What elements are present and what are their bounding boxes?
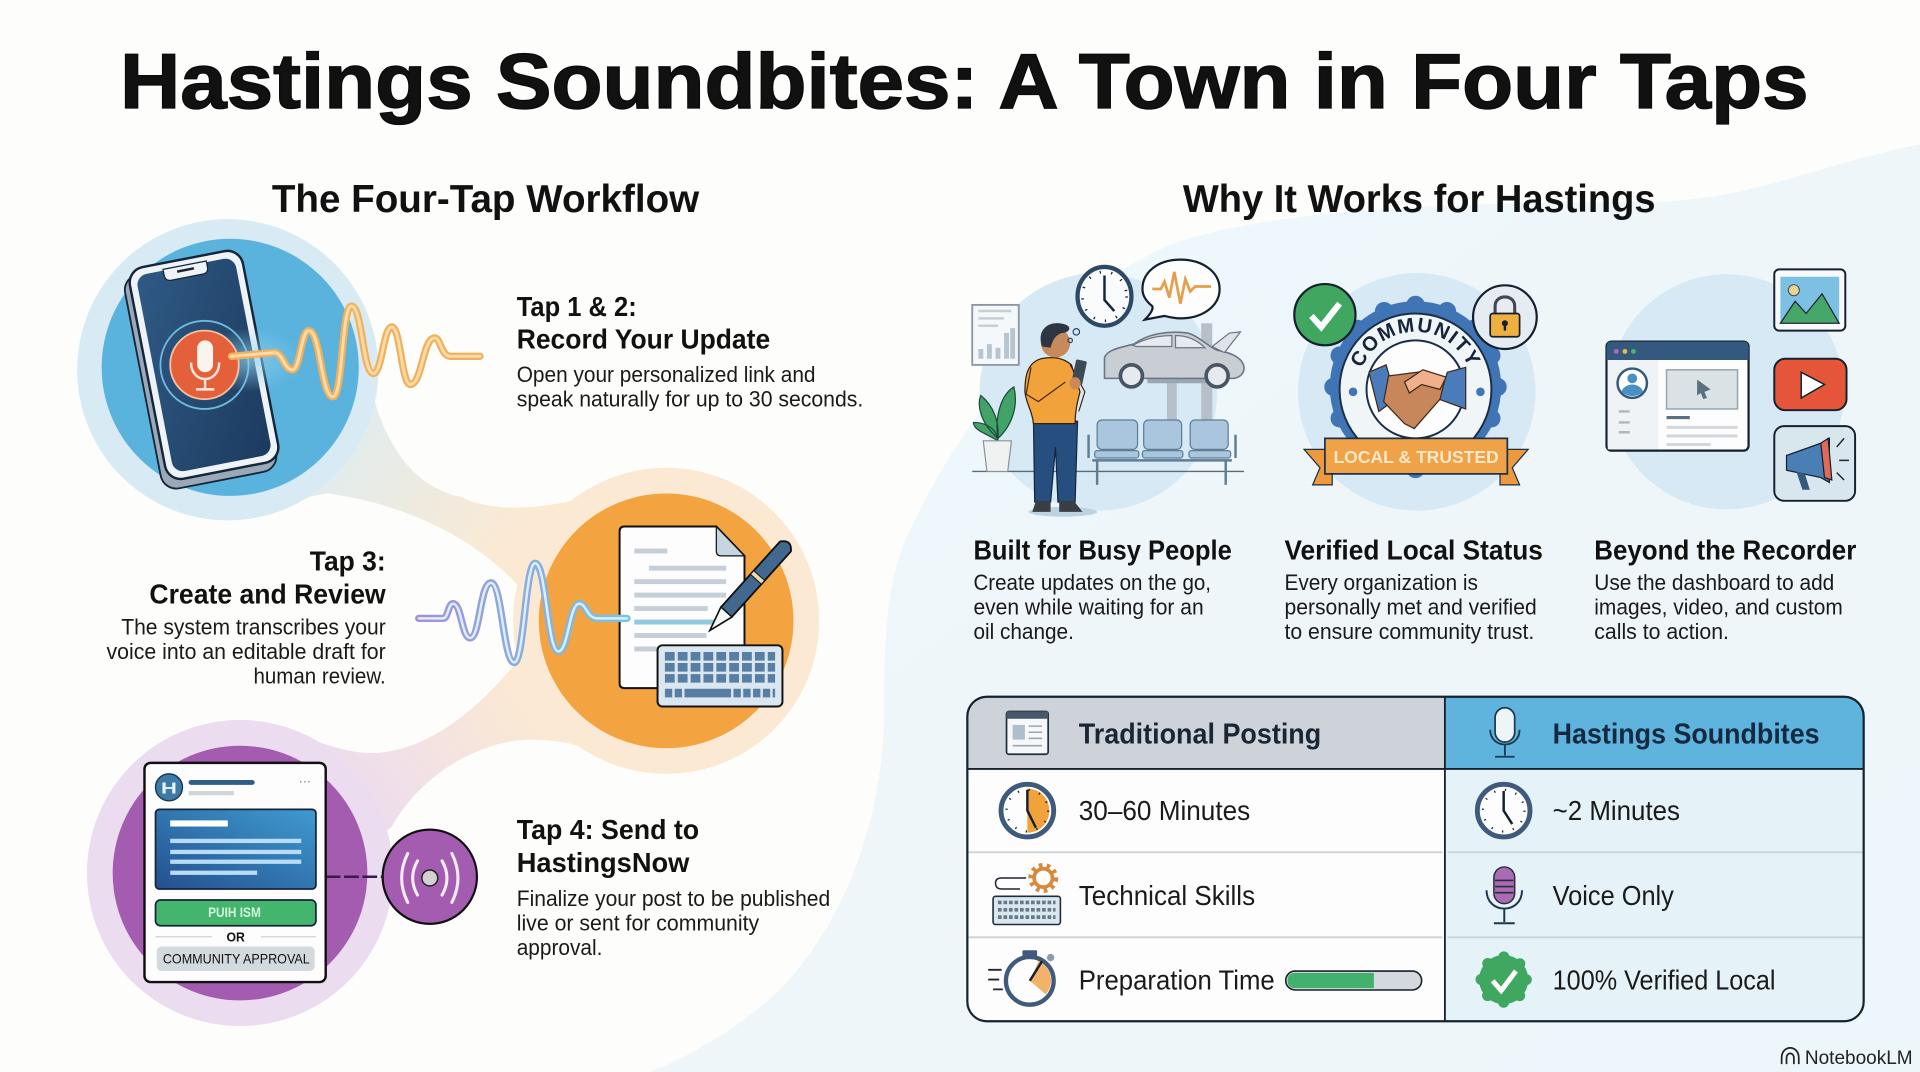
comparison table bbox=[967, 697, 1864, 1021]
step 1: phone illustration bbox=[77, 219, 480, 520]
text block: beyond the recorder: calls to action. bbox=[1594, 619, 1729, 644]
row: verified local bbox=[1480, 956, 1776, 1003]
row: 30-60 minutes: 30–60 Minutes bbox=[1079, 795, 1250, 826]
text block: tap 4: live or sent for community bbox=[517, 911, 759, 936]
post card: PUIH ISM bbox=[208, 905, 261, 920]
mic button bbox=[160, 321, 302, 409]
speech bubble bbox=[1142, 260, 1220, 320]
connector ribbon: orange to purple bbox=[233, 649, 618, 863]
text block: tap 1 and 2: Open your personalized link and bbox=[517, 362, 816, 387]
document bbox=[620, 527, 744, 688]
text block: tap 1 and 2: Tap 1 & 2: bbox=[517, 291, 637, 322]
text block: beyond the recorder: images, video, and custom bbox=[1594, 595, 1843, 620]
illustration: dashboard and media bbox=[1607, 269, 1855, 509]
lift posts bbox=[1167, 323, 1212, 420]
text block: built for busy people: Built for Busy People bbox=[973, 535, 1232, 566]
text block: built for busy people: even while waiting for an bbox=[973, 595, 1204, 620]
row: about 2 minutes bbox=[1477, 784, 1680, 837]
connector ribbon: blue to orange bbox=[251, 355, 624, 612]
text block: beyond the recorder bbox=[1594, 535, 1856, 644]
text block: tap 3: human review. bbox=[253, 663, 386, 688]
text block: verified local status: Every organization is bbox=[1284, 570, 1478, 595]
broadcast icon bbox=[383, 830, 477, 924]
post card: OR bbox=[227, 930, 246, 945]
phone bbox=[121, 248, 283, 491]
scalloped badge bbox=[1324, 296, 1507, 478]
header: hastings soundbites bbox=[1490, 708, 1820, 757]
handshake bbox=[1369, 365, 1466, 429]
text block: tap 3: Create and Review bbox=[149, 579, 386, 610]
blue purple sound wave bbox=[419, 563, 627, 662]
car bbox=[1104, 332, 1244, 387]
floor line bbox=[972, 470, 1244, 472]
header: traditional posting: Traditional Posting bbox=[1079, 718, 1321, 750]
text block: tap 1 and 2 bbox=[517, 291, 863, 412]
browser window bbox=[1607, 342, 1749, 451]
clock bbox=[1078, 267, 1131, 326]
text block: tap 1 and 2: speak naturally for up to 30 seconds. bbox=[517, 387, 863, 412]
ribbon bbox=[1304, 438, 1528, 485]
lock circle bbox=[1473, 285, 1537, 349]
video play icon bbox=[1774, 359, 1847, 410]
row: about 2 minutes: ~2 Minutes bbox=[1553, 795, 1680, 826]
plant bbox=[973, 387, 1015, 471]
step 2: document illustration bbox=[419, 468, 819, 774]
header: traditional posting bbox=[1007, 711, 1321, 754]
text block: built for busy people bbox=[973, 535, 1232, 644]
text block: beyond the recorder: Use the dashboard to add bbox=[1594, 570, 1834, 595]
check circle bbox=[1294, 284, 1356, 345]
person bbox=[1025, 323, 1097, 517]
scalloped badge: COMMUNITY bbox=[1352, 318, 1481, 366]
text block: tap 4 bbox=[517, 814, 830, 960]
text block: tap 3: The system transcribes your bbox=[121, 614, 386, 639]
heading: why it works for hastings: Why It Works for Hastings bbox=[1183, 178, 1656, 221]
illustration: busy person at garage bbox=[972, 260, 1244, 517]
text block: tap 4: approval. bbox=[517, 935, 602, 960]
orange sound wave bbox=[231, 306, 480, 397]
text block: tap 1 and 2: Record Your Update bbox=[517, 323, 770, 354]
text block: tap 3 bbox=[107, 546, 386, 688]
text block: built for busy people: oil change. bbox=[973, 619, 1074, 644]
row: technical skills bbox=[993, 865, 1255, 924]
panel: why it works bbox=[966, 178, 1865, 1022]
post card: COMMUNITY APPROVAL bbox=[163, 952, 310, 967]
panel: four-tap workflow bbox=[77, 178, 863, 1026]
row: 30-60 minutes bbox=[1001, 784, 1250, 837]
text block: tap 4: Tap 4: Send to bbox=[517, 814, 699, 845]
step 3: post card illustration bbox=[87, 720, 477, 1026]
text block: tap 3: voice into an editable draft for bbox=[107, 639, 386, 664]
background blob: right pale blue bbox=[649, 144, 1920, 1072]
waiting bench bbox=[1089, 420, 1236, 485]
row: voice only: Voice Only bbox=[1553, 880, 1674, 911]
text block: tap 4: Finalize your post to be published bbox=[517, 886, 830, 911]
row: preparation time: Preparation Time bbox=[1079, 964, 1275, 995]
text block: verified local status bbox=[1284, 535, 1543, 644]
row: preparation time bbox=[988, 950, 1422, 1005]
wall chart bbox=[972, 305, 1019, 365]
image icon bbox=[1774, 269, 1845, 331]
text block: verified local status: to ensure community trust. bbox=[1284, 619, 1534, 644]
post card: ··· bbox=[299, 774, 311, 788]
text block: built for busy people: Create updates on the go, bbox=[973, 570, 1211, 595]
megaphone icon bbox=[1774, 426, 1855, 501]
title: Hastings Soundbites: A Town in Four Taps bbox=[120, 37, 1809, 125]
keyboard bbox=[658, 645, 782, 707]
progress bar bbox=[1286, 971, 1422, 990]
header: hastings soundbites: Hastings Soundbites bbox=[1553, 718, 1820, 750]
post card bbox=[144, 763, 326, 982]
text block: verified local status: Verified Local Status bbox=[1284, 535, 1543, 566]
row: technical skills: Technical Skills bbox=[1079, 880, 1255, 911]
text block: verified local status: personally met and verified bbox=[1284, 595, 1537, 620]
watermark: notebooklm: NotebookLM bbox=[1805, 1048, 1913, 1069]
dashed connector bbox=[326, 876, 384, 878]
text block: tap 3: Tap 3: bbox=[310, 546, 386, 577]
row: verified local: 100% Verified Local bbox=[1553, 964, 1776, 995]
illustration: verified badge bbox=[1293, 273, 1538, 510]
heading: the four-tap workflow: The Four-Tap Workflow bbox=[272, 178, 700, 221]
text block: tap 4: HastingsNow bbox=[517, 847, 689, 878]
post card: H bbox=[161, 780, 177, 797]
pen bbox=[705, 538, 794, 635]
ribbon: LOCAL & TRUSTED bbox=[1333, 447, 1499, 467]
text block: beyond the recorder: Beyond the Recorder bbox=[1594, 535, 1856, 566]
row: voice only bbox=[1487, 867, 1674, 923]
